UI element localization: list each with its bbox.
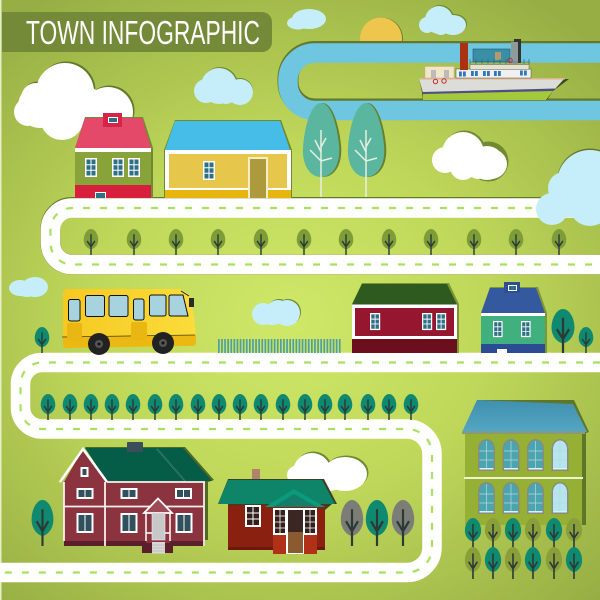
bus doors [67, 323, 82, 341]
bus [62, 289, 196, 355]
bus wheels [88, 332, 174, 355]
house: blue roof teal walls [481, 282, 547, 353]
apartment building [462, 400, 589, 525]
grey tree right [392, 500, 414, 546]
trees row lower road [41, 394, 418, 420]
building windows [478, 439, 568, 514]
fence [218, 339, 342, 353]
trees grid by building [465, 518, 582, 579]
ship superstructure [456, 69, 531, 78]
cloud: white behind small house [287, 452, 368, 491]
large house trim [60, 449, 107, 482]
large house walls [105, 482, 205, 544]
small tree right [579, 327, 593, 353]
cloud: white middle right [432, 130, 508, 182]
bus windows [68, 295, 188, 321]
tall tree left [303, 103, 341, 197]
cloud: pale blue top right [419, 5, 467, 35]
big tree right [552, 309, 574, 353]
building shadow [465, 400, 589, 525]
small house chimney [252, 469, 260, 483]
building wall [465, 434, 582, 525]
building roof [462, 400, 587, 432]
cloud: pale blue by fence [252, 299, 301, 326]
large house porch [142, 498, 173, 554]
teal tree centre [366, 500, 388, 546]
large red house [60, 442, 214, 554]
house: burgundy with green roof [352, 283, 459, 353]
road upper [50, 207, 600, 264]
tall tree right [348, 103, 386, 197]
large house roof [85, 447, 214, 540]
grey tree left [341, 500, 363, 546]
bus mirror [181, 291, 189, 296]
cloud: pale blue left small [9, 277, 48, 297]
cloud: large white top left [14, 62, 134, 140]
cloud: pale blue upper middle [194, 67, 253, 105]
sun [360, 18, 403, 41]
trees row upper road [84, 229, 566, 255]
ship [419, 39, 569, 100]
tree left of large house [32, 500, 53, 546]
small red house [218, 469, 337, 554]
title banner [2, 12, 272, 52]
title text: TOWN INFOGRAPHIC [26, 14, 260, 51]
house: red roof green walls [75, 113, 153, 198]
river [288, 52, 600, 110]
small house roof [218, 479, 337, 510]
bus body [63, 289, 196, 348]
cloud: pale blue top small [287, 9, 326, 30]
small house porch [265, 489, 325, 554]
large house windows [76, 467, 192, 533]
road lower [0, 362, 600, 572]
small tree left of bus [35, 327, 49, 353]
small house window [245, 505, 261, 527]
small house walls [228, 505, 325, 548]
house: blue roof yellow walls [164, 120, 292, 198]
cloud: pale blue right edge [536, 148, 600, 226]
ship hull [419, 79, 569, 100]
